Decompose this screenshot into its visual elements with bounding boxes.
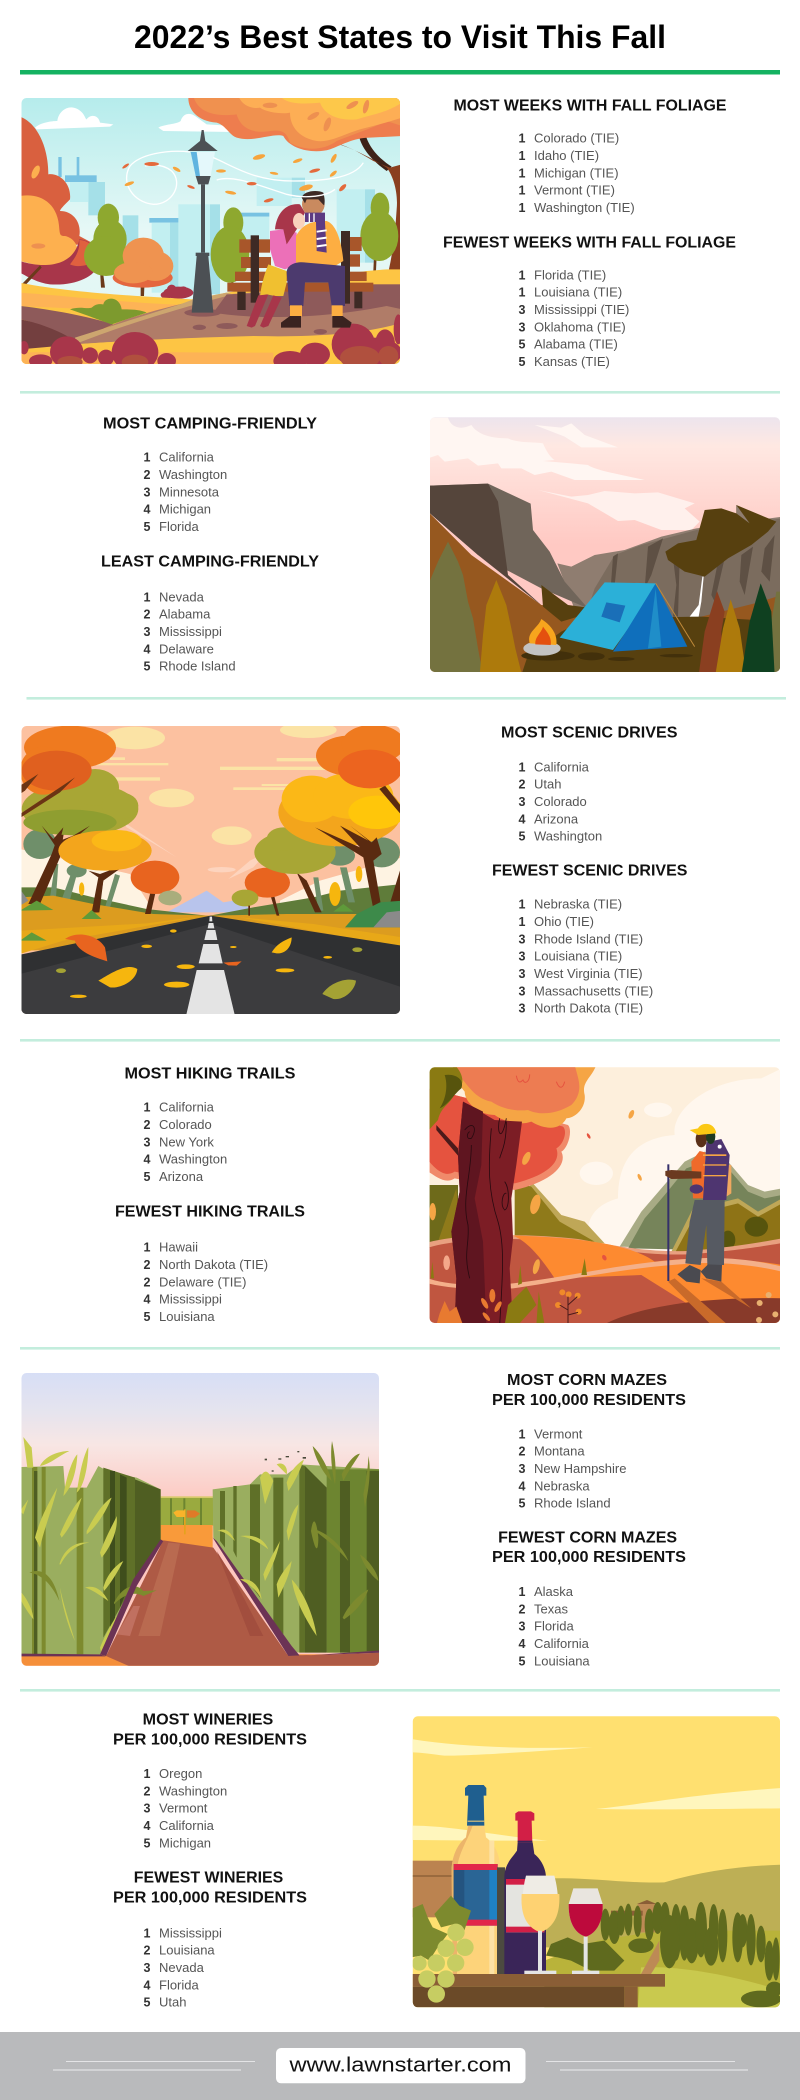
list: fewest weeks with fall foliage: 1 xyxy=(519,268,526,282)
list: fewest corn mazes: 1 xyxy=(519,1585,526,1599)
list: fewest wineries: 5 xyxy=(144,1996,151,2010)
heading: per 100,000 residents: PER 100,000 RESIDENTS xyxy=(113,1732,307,1749)
list: fewest scenic drives: Ohio (TIE) xyxy=(534,914,594,929)
panel: corn mazes xyxy=(20,1371,686,1668)
list: most corn mazes: 5 xyxy=(519,1497,526,1511)
list: most corn mazes: New Hampshire xyxy=(534,1461,626,1476)
list: fewest wineries: 4 xyxy=(144,1978,151,1992)
list: least camping-friendly: 4 xyxy=(144,642,151,656)
list: fewest hiking trails: Louisiana xyxy=(159,1309,215,1324)
list: most weeks with fall foliage: 1 xyxy=(519,201,526,215)
list: fewest corn mazes: Florida xyxy=(534,1619,575,1634)
list: most corn mazes: 1 xyxy=(519,1427,526,1441)
list: most scenic drives: Washington xyxy=(534,829,602,844)
heading: fewest wineries: FEWEST WINERIES xyxy=(134,1870,284,1887)
heading: per 100,000 residents: PER 100,000 RESIDENTS xyxy=(492,1392,686,1409)
list: most camping-friendly: Michigan xyxy=(159,502,211,517)
list: most wineries: Vermont xyxy=(159,1801,208,1816)
list: most hiking trails: 4 xyxy=(144,1153,151,1167)
heading: least camping-friendly: LEAST CAMPING-FRIENDLY xyxy=(101,554,319,571)
heading: most scenic drives: MOST SCENIC DRIVES xyxy=(501,724,678,741)
list: fewest hiking trails: 4 xyxy=(144,1293,151,1307)
list: most hiking trails: New York xyxy=(159,1134,214,1149)
list: most hiking trails: 1 xyxy=(144,1101,151,1115)
title: 2022’s Best States to Visit This Fall xyxy=(134,19,666,55)
list: least camping-friendly: Alabama xyxy=(159,607,211,622)
list: most scenic drives: 1 xyxy=(519,760,526,774)
list: fewest wineries: Nevada xyxy=(159,1960,205,1975)
illustration: corn maze path xyxy=(20,1371,382,1668)
list: most camping-friendly: 4 xyxy=(144,503,151,517)
list: most camping-friendly: 3 xyxy=(144,485,151,499)
list: most hiking trails: Colorado xyxy=(159,1117,212,1132)
list: fewest hiking trails: Hawaii xyxy=(159,1240,198,1255)
panel: wineries xyxy=(113,1712,783,2010)
list: fewest scenic drives: Massachusetts (TIE) xyxy=(534,983,653,998)
list: most wineries: Oregon xyxy=(159,1766,202,1781)
list: most corn mazes: 3 xyxy=(519,1462,526,1476)
list: most weeks with fall foliage: 1 xyxy=(519,166,526,180)
list: fewest scenic drives: 3 xyxy=(519,967,526,981)
list: most camping-friendly: Washington xyxy=(159,467,227,482)
list: most camping-friendly: 1 xyxy=(144,451,151,465)
list: least camping-friendly: 5 xyxy=(144,660,151,674)
list: most weeks with fall foliage: Michigan (TIE) xyxy=(534,165,619,180)
list: most corn mazes: Nebraska xyxy=(534,1478,590,1493)
list: fewest corn mazes: 5 xyxy=(519,1654,526,1668)
list: most hiking trails: 5 xyxy=(144,1170,151,1184)
illustration: autumn road xyxy=(20,722,405,1016)
list: most weeks with fall foliage: 1 xyxy=(519,132,526,146)
list: fewest scenic drives: 1 xyxy=(519,898,526,912)
panel: fall foliage xyxy=(19,96,736,372)
list: least camping-friendly: Delaware xyxy=(159,641,214,656)
list: fewest corn mazes xyxy=(519,1584,590,1668)
list: least camping-friendly: Nevada xyxy=(159,589,205,604)
list: most camping-friendly: Florida xyxy=(159,519,200,534)
list: fewest corn mazes: Alaska xyxy=(534,1584,574,1599)
list: fewest hiking trails: North Dakota (TIE) xyxy=(159,1257,268,1272)
list: most scenic drives: 3 xyxy=(519,795,526,809)
title rule xyxy=(20,70,780,74)
list: least camping-friendly: Mississippi xyxy=(159,624,222,639)
list: fewest hiking trails: 1 xyxy=(144,1241,151,1255)
list: fewest scenic drives xyxy=(519,897,653,1016)
list: fewest scenic drives: Nebraska (TIE) xyxy=(534,897,622,912)
heading: fewest hiking trails: FEWEST HIKING TRAILS xyxy=(115,1203,305,1220)
list: fewest wineries: 2 xyxy=(144,1944,151,1958)
illustration: wine bottles and vineyard xyxy=(411,1714,783,2010)
list: least camping-friendly xyxy=(144,589,236,674)
list: fewest wineries: Utah xyxy=(159,1995,186,2010)
list: most scenic drives: 2 xyxy=(519,778,526,792)
list: fewest weeks with fall foliage: Oklahoma (TIE) xyxy=(534,319,626,334)
list: fewest corn mazes: 3 xyxy=(519,1620,526,1634)
list: fewest wineries: Mississippi xyxy=(159,1925,222,1940)
heading: fewest scenic drives: FEWEST SCENIC DRIVES xyxy=(492,863,688,880)
list: fewest corn mazes: Texas xyxy=(534,1601,568,1616)
list: fewest scenic drives: 3 xyxy=(519,932,526,946)
list: fewest wineries: Florida xyxy=(159,1977,200,1992)
list: fewest hiking trails: 2 xyxy=(144,1275,151,1289)
list: most hiking trails: Washington xyxy=(159,1152,227,1167)
list: fewest weeks with fall foliage: 3 xyxy=(519,303,526,317)
heading: most weeks with fall foliage: MOST WEEKS WITH FALL FOLIAGE xyxy=(454,97,727,114)
list: most corn mazes: 2 xyxy=(519,1445,526,1459)
list: fewest corn mazes: 4 xyxy=(519,1637,526,1651)
list: most wineries: 2 xyxy=(144,1784,151,1798)
list: most wineries: 1 xyxy=(144,1767,151,1781)
list: fewest scenic drives: 1 xyxy=(519,915,526,929)
list: fewest scenic drives: North Dakota (TIE) xyxy=(534,1001,643,1016)
list: least camping-friendly: Rhode Island xyxy=(159,659,236,674)
list: fewest hiking trails: 5 xyxy=(144,1310,151,1324)
list: most weeks with fall foliage: Idaho (TIE) xyxy=(534,148,599,163)
list: most hiking trails: Arizona xyxy=(159,1169,204,1184)
list: most wineries: Michigan xyxy=(159,1835,211,1850)
website badge xyxy=(276,2048,526,2083)
list: fewest scenic drives: West Virginia (TIE) xyxy=(534,966,643,981)
list: most corn mazes: Montana xyxy=(534,1444,585,1459)
list: most wineries: 4 xyxy=(144,1819,151,1833)
panel: hiking trails xyxy=(115,1065,782,1325)
list: most hiking trails xyxy=(144,1100,227,1184)
list: most scenic drives: California xyxy=(534,759,590,774)
heading: per 100,000 residents: PER 100,000 RESIDENTS xyxy=(492,1549,686,1566)
list: most wineries: Washington xyxy=(159,1783,227,1798)
illustration: couple on a park bench xyxy=(19,96,403,372)
list: most camping-friendly xyxy=(144,450,227,534)
list: fewest weeks with fall foliage: Kansas (TIE) xyxy=(534,354,610,369)
heading: fewest corn mazes: FEWEST CORN MAZES xyxy=(498,1529,677,1546)
list: most scenic drives: 5 xyxy=(519,830,526,844)
heading: fewest weeks with fall foliage: FEWEST WEEKS WITH FALL FOLIAGE xyxy=(443,234,736,251)
list: fewest wineries: 1 xyxy=(144,1926,151,1940)
list: fewest corn mazes: California xyxy=(534,1636,590,1651)
list: fewest scenic drives: Rhode Island (TIE) xyxy=(534,931,643,946)
list: most weeks with fall foliage: Vermont (TIE) xyxy=(534,183,615,198)
list: fewest scenic drives: 3 xyxy=(519,984,526,998)
list: fewest weeks with fall foliage: Louisiana (TIE) xyxy=(534,285,622,300)
list: fewest weeks with fall foliage: 5 xyxy=(519,355,526,369)
list: most scenic drives: Colorado xyxy=(534,794,587,809)
heading: most camping-friendly: MOST CAMPING-FRIENDLY xyxy=(103,416,317,433)
panel: scenic drives xyxy=(20,722,688,1016)
list: most wineries: 5 xyxy=(144,1836,151,1850)
list: most corn mazes: Rhode Island xyxy=(534,1496,611,1511)
list: least camping-friendly: 2 xyxy=(144,608,151,622)
illustration: tent in a canyon xyxy=(428,415,782,675)
list: fewest corn mazes: 2 xyxy=(519,1602,526,1616)
list: most camping-friendly: 2 xyxy=(144,468,151,482)
list: fewest hiking trails: 2 xyxy=(144,1258,151,1272)
list: least camping-friendly: 3 xyxy=(144,625,151,639)
list: fewest scenic drives: Louisiana (TIE) xyxy=(534,949,622,964)
list: most camping-friendly: Minnesota xyxy=(159,484,220,499)
heading: most wineries: MOST WINERIES xyxy=(143,1712,274,1729)
heading: per 100,000 residents: PER 100,000 RESIDENTS xyxy=(113,1889,307,1906)
list: most hiking trails: 3 xyxy=(144,1135,151,1149)
list: most wineries xyxy=(144,1766,227,1850)
list: most hiking trails: California xyxy=(159,1100,215,1115)
illustration: hiker under an autumn tree xyxy=(428,1065,782,1325)
list: fewest weeks with fall foliage xyxy=(519,267,629,369)
list: most weeks with fall foliage: 1 xyxy=(519,184,526,198)
list: most corn mazes: 4 xyxy=(519,1479,526,1493)
list: fewest scenic drives: 3 xyxy=(519,950,526,964)
list: least camping-friendly: 1 xyxy=(144,590,151,604)
list: fewest hiking trails: Mississippi xyxy=(159,1292,222,1307)
list: fewest weeks with fall foliage: Alabama (TIE) xyxy=(534,337,618,352)
list: most wineries: 3 xyxy=(144,1802,151,1816)
list: fewest weeks with fall foliage: Mississippi (TIE) xyxy=(534,302,629,317)
heading: most hiking trails: MOST HIKING TRAILS xyxy=(124,1065,296,1082)
list: most weeks with fall foliage: 1 xyxy=(519,149,526,163)
list: most weeks with fall foliage xyxy=(519,131,635,215)
list: most scenic drives xyxy=(519,759,602,844)
list: fewest weeks with fall foliage: Florida (TIE) xyxy=(534,267,606,282)
list: most scenic drives: Arizona xyxy=(534,811,579,826)
list: most scenic drives: 4 xyxy=(519,812,526,826)
list: most scenic drives: Utah xyxy=(534,777,561,792)
heading: most corn mazes: MOST CORN MAZES xyxy=(507,1372,667,1389)
list: most weeks with fall foliage: Colorado (TIE) xyxy=(534,131,619,146)
list: most hiking trails: 2 xyxy=(144,1118,151,1132)
list: most weeks with fall foliage: Washington (TIE) xyxy=(534,200,635,215)
list: most camping-friendly: 5 xyxy=(144,520,151,534)
list: most wineries: California xyxy=(159,1818,215,1833)
list: fewest weeks with fall foliage: 3 xyxy=(519,320,526,334)
list: fewest hiking trails xyxy=(144,1240,268,1324)
footer xyxy=(0,2032,800,2100)
list: fewest wineries: Louisiana xyxy=(159,1943,215,1958)
list: fewest hiking trails: Delaware (TIE) xyxy=(159,1274,246,1289)
website badge: www.lawnstarter.com xyxy=(288,2054,512,2076)
list: fewest weeks with fall foliage: 5 xyxy=(519,338,526,352)
list: fewest scenic drives: 3 xyxy=(519,1002,526,1016)
list: most corn mazes: Vermont xyxy=(534,1426,583,1441)
list: fewest wineries: 3 xyxy=(144,1961,151,1975)
list: fewest wineries xyxy=(144,1925,222,2010)
list: fewest corn mazes: Louisiana xyxy=(534,1653,590,1668)
panel: camping xyxy=(101,415,782,675)
list: fewest weeks with fall foliage: 1 xyxy=(519,286,526,300)
list: most camping-friendly: California xyxy=(159,450,215,465)
list: most corn mazes xyxy=(519,1426,626,1511)
